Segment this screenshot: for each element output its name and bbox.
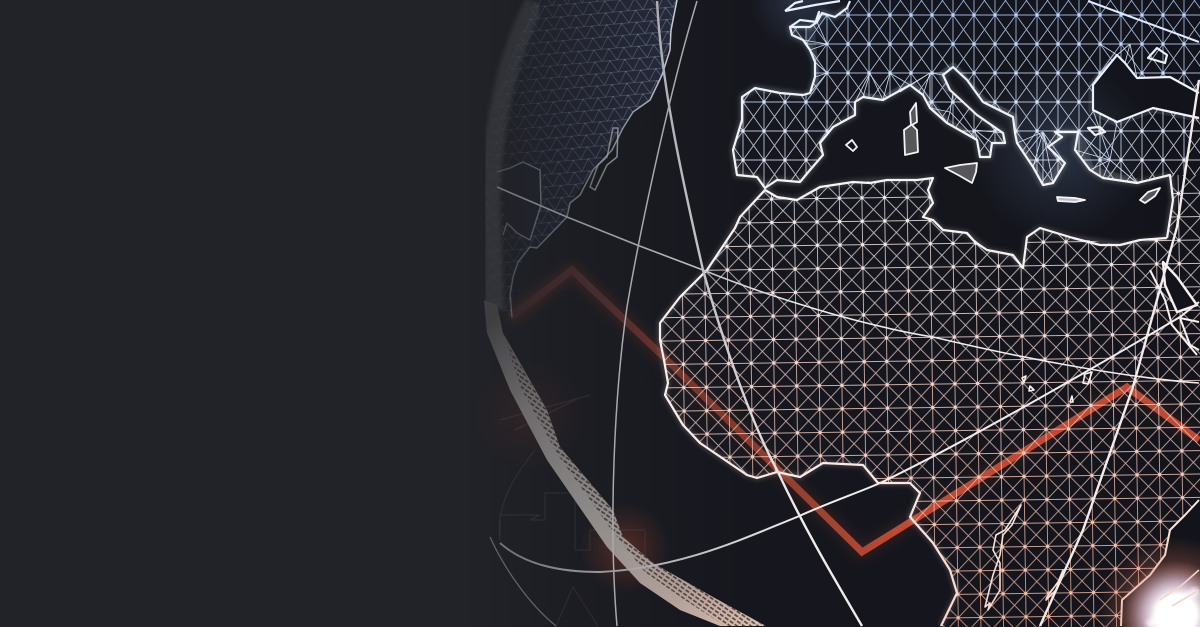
great circle lines <box>490 1 1199 626</box>
arc: thin left meridian <box>613 1 697 626</box>
faint chart traces behind the globe edge <box>499 395 645 626</box>
arc: long horizontal <box>497 187 1199 383</box>
arc: right meridian <box>1040 80 1199 626</box>
arc: rising from lower left <box>500 302 1199 572</box>
arc: steep central <box>657 1 862 626</box>
lakes: East Africa <box>985 372 1092 610</box>
coast: americas <box>497 0 677 317</box>
land tint: americas <box>484 0 677 317</box>
red route line <box>510 270 1199 552</box>
islands: Mediterranean <box>846 103 1160 203</box>
Americas wireframe, faded <box>484 0 678 317</box>
land mesh: Europe and Africa <box>661 0 1200 627</box>
mesh: americas <box>484 0 676 314</box>
coast density haze <box>810 27 1200 185</box>
mesh fans near the coast <box>803 22 1137 185</box>
arc: faint lower left <box>490 537 556 626</box>
soft glows <box>475 0 1150 593</box>
lens flare <box>1098 537 1200 627</box>
coastline: Europe <box>733 1 1199 238</box>
globe rim haze <box>490 2 535 310</box>
arc: top right <box>1088 1 1199 42</box>
illustration: wireframe globe <box>484 0 1200 627</box>
coastline: Africa <box>660 178 1199 626</box>
globe edge band <box>484 300 766 626</box>
